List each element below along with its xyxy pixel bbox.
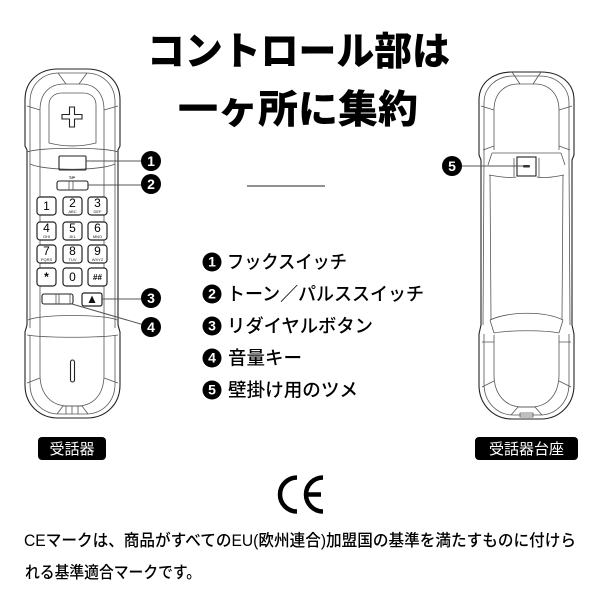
keypad: 9 (94, 244, 101, 258)
marker 4: 4 (147, 319, 155, 335)
legend list (202, 252, 424, 400)
keypad: 4 (43, 221, 50, 235)
marker 5 (442, 156, 462, 176)
CE description text: れる基準適合マークです。 (25, 563, 201, 582)
handset base rear view (479, 72, 574, 419)
marker 3: 3 (147, 290, 155, 306)
legend item 1: フックスイッチ (227, 252, 347, 272)
wall hook tab (514, 157, 539, 177)
legend item 2: 2 (208, 286, 216, 302)
legend item 2: トーン／パルススイッチ (227, 284, 424, 304)
keypad: * (44, 270, 49, 284)
marker 1 (141, 151, 161, 171)
legend item 3: リダイヤルボタン (227, 316, 373, 336)
CE description text: CEマークは、商品がすべてのEU(欧州連合)加盟国の基準を満たすものに付けら (24, 530, 576, 550)
keypad: ABC (68, 209, 77, 214)
divider rule (247, 186, 325, 187)
marker 1: 1 (147, 153, 155, 169)
marker 3 (141, 288, 161, 308)
legend item 4: 音量キー (228, 348, 302, 368)
keypad: 3 (94, 196, 101, 210)
label: handset: 受話器 (49, 441, 95, 458)
volume key (42, 294, 73, 304)
title (147, 31, 450, 132)
redial button (82, 293, 102, 306)
leader line 5 (452, 165, 523, 167)
keypad: 2 (69, 196, 76, 210)
legend item 5: 壁掛け用のツメ (228, 380, 358, 400)
keypad: 6 (94, 221, 101, 235)
keypad: 5 (69, 221, 76, 235)
keypad (37, 196, 107, 286)
keypad: WXYZ (92, 257, 104, 262)
marker 2: 2 (147, 176, 155, 192)
legend item 3: 3 (208, 318, 216, 334)
marker 4 (141, 317, 161, 337)
plus mark (62, 107, 82, 127)
speaker panel (49, 93, 96, 146)
marker 5: 5 (448, 158, 456, 174)
marker 2 (141, 174, 161, 194)
handset outline (25, 69, 120, 418)
keypad: 0 (69, 270, 76, 284)
CE description text (24, 530, 576, 582)
keypad: ## (93, 273, 102, 282)
legend item 1: 1 (208, 254, 216, 270)
legend item 4: 4 (208, 350, 216, 366)
legend item 5: 5 (208, 382, 216, 398)
earpiece slot (70, 360, 74, 382)
keypad: DEF (94, 209, 102, 214)
keypad: TUV (68, 257, 77, 262)
keypad: JKL (69, 234, 77, 239)
label: handset (38, 437, 106, 460)
hook switch (59, 156, 86, 170)
tone pulse switch (57, 175, 88, 190)
icon: CE mark (280, 478, 323, 512)
title: コントロール部は (147, 31, 450, 74)
keypad: MNO (93, 234, 102, 239)
label: handset base: 受話器台座 (489, 441, 564, 458)
leader lines (72, 161, 151, 327)
keypad: GHI (43, 234, 50, 239)
keypad: PQRS (41, 257, 52, 262)
title: 一ヶ所に集約 (178, 89, 418, 132)
tone pulse switch: T/P (69, 175, 75, 180)
label: handset base (475, 437, 578, 460)
phone handset front view (25, 69, 120, 418)
keypad: 1 (43, 199, 50, 213)
keypad: 7 (43, 244, 50, 258)
keypad: 8 (69, 244, 76, 258)
